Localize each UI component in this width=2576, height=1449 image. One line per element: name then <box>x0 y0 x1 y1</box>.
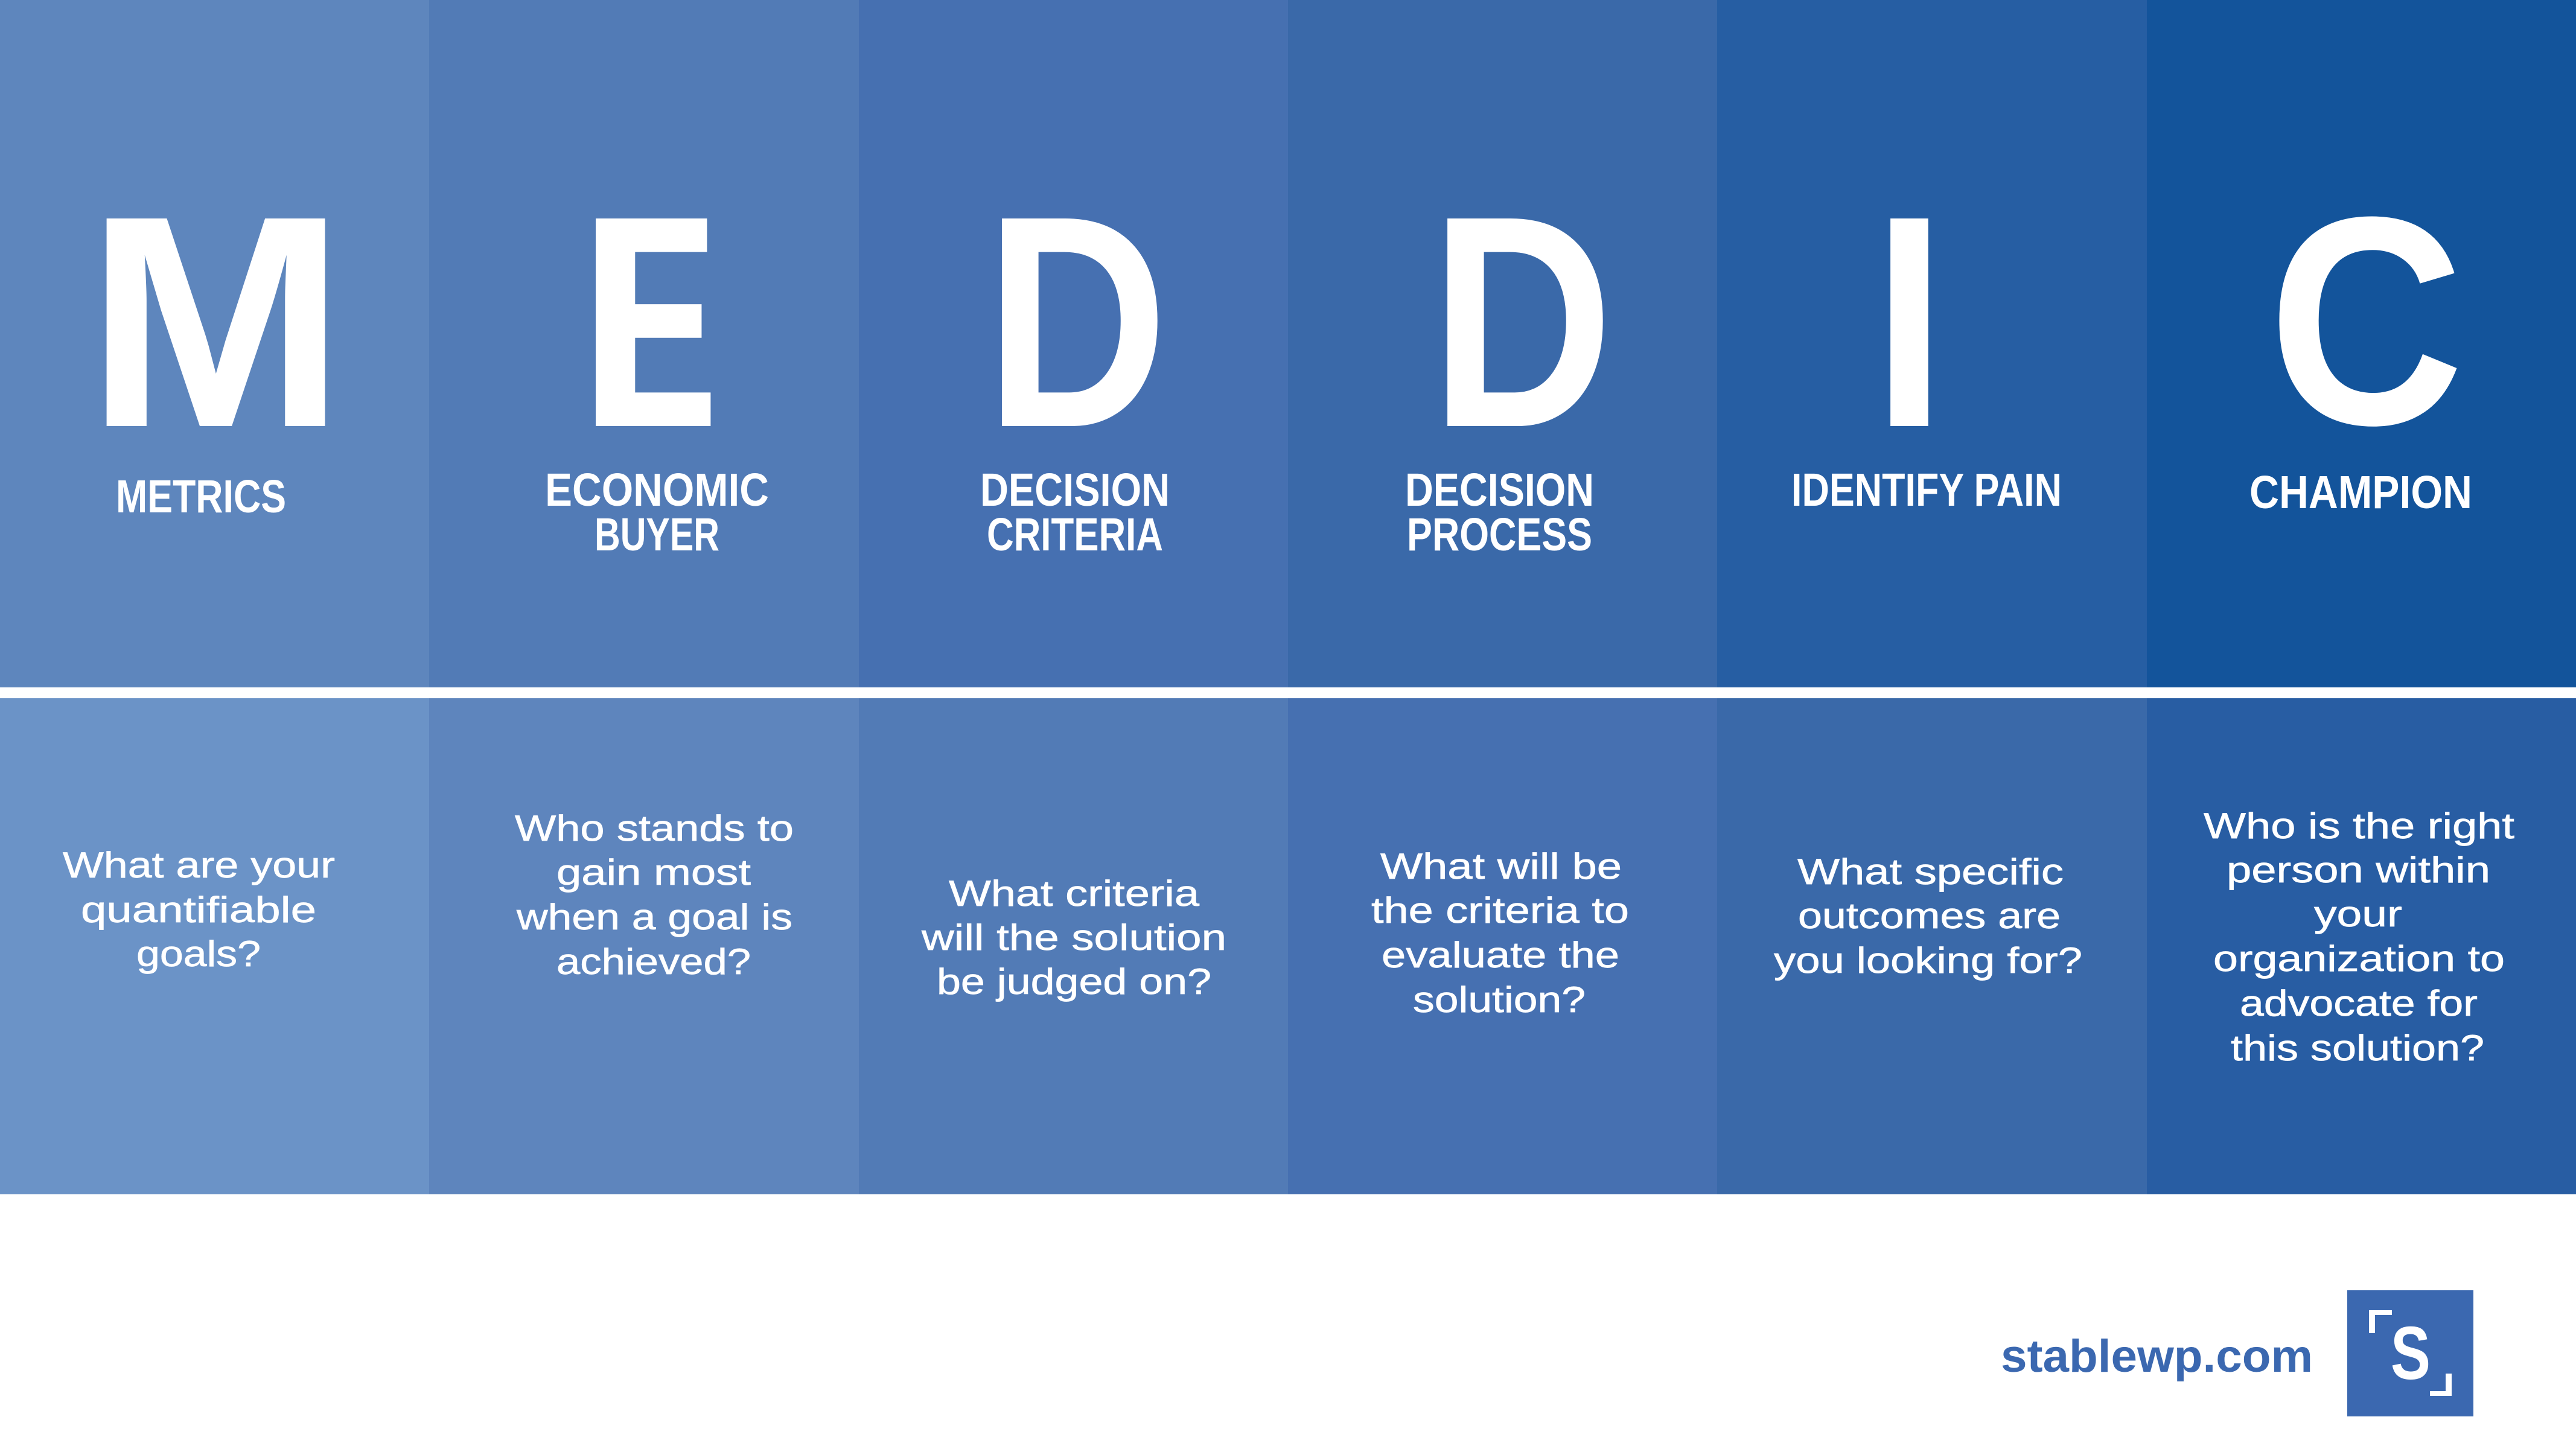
question: Identify Pain <box>1774 852 2082 981</box>
panel: Metrics <box>0 0 429 1194</box>
question: Decision Criteria <box>921 873 1226 1002</box>
label: Decision Criteria: CRITERIA <box>987 509 1163 561</box>
label: Identify Pain: IDENTIFY PAIN <box>1791 464 2062 516</box>
question: Champion: Who is the right <box>2204 806 2514 846</box>
label: Metrics: METRICS <box>116 471 286 523</box>
question: Champion: your <box>2314 894 2402 934</box>
question: Identify Pain: you looking for? <box>1774 940 2082 981</box>
big letter M: M <box>86 153 346 490</box>
big letter C: C <box>2268 154 2464 486</box>
panel: Champion <box>2147 0 2576 1194</box>
question: Champion: organization to <box>2213 938 2505 979</box>
question: Champion: this solution? <box>2231 1028 2484 1068</box>
big letter E: E <box>590 154 711 491</box>
label: Decision Process: PROCESS <box>1407 509 1592 561</box>
label: Economic Buyer: BUYER <box>595 509 719 561</box>
big letter D: D <box>1430 153 1613 490</box>
question: Decision Process <box>1371 846 1629 1020</box>
question: Champion: person within <box>2227 850 2490 890</box>
panel: Decision Process <box>1288 0 1717 1194</box>
label: Decision Criteria <box>980 464 1170 561</box>
label: Economic Buyer: ECONOMIC <box>545 464 769 516</box>
label: Economic Buyer <box>545 464 769 561</box>
big letter D: D <box>985 153 1168 490</box>
question: Decision Process: What will be <box>1380 846 1622 887</box>
question: Economic Buyer: when a goal is <box>516 897 792 937</box>
question: Decision Criteria: will the solution <box>921 917 1226 958</box>
panel: Identify Pain <box>1717 0 2147 1194</box>
question: Metrics: What are your <box>63 845 335 885</box>
icon: logo: S <box>2391 1311 2431 1395</box>
question: Economic Buyer: Who stands to <box>515 808 794 849</box>
question: Decision Criteria: be judged on? <box>937 961 1211 1002</box>
label: Decision Process: DECISION <box>1405 464 1594 516</box>
question: Decision Process: solution? <box>1413 979 1586 1020</box>
question: Champion <box>2204 806 2514 1068</box>
question: Decision Process: the criteria to <box>1371 890 1629 931</box>
question: Economic Buyer <box>515 808 794 982</box>
question: Metrics: quantifiable <box>81 890 316 930</box>
question: Economic Buyer: gain most <box>556 852 751 893</box>
icon: logo <box>2347 1290 2473 1416</box>
panel: Decision Criteria <box>859 0 1288 1194</box>
panel: Economic Buyer <box>429 0 859 1194</box>
question: Decision Criteria: What criteria <box>949 873 1200 914</box>
question: Economic Buyer: achieved? <box>556 941 751 982</box>
label: Decision Process <box>1405 464 1594 561</box>
brand name: stablewp.com <box>2001 1331 2313 1382</box>
question: Identify Pain: outcomes are <box>1798 896 2061 936</box>
question: Metrics: goals? <box>136 934 261 974</box>
question: Metrics <box>63 845 335 974</box>
label: Decision Criteria: DECISION <box>980 464 1170 516</box>
big letter I: I <box>1873 154 1946 491</box>
question: Champion: advocate for <box>2240 983 2478 1024</box>
label: Champion: CHAMPION <box>2249 467 2472 518</box>
question: Identify Pain: What specific <box>1797 852 2064 892</box>
question: Decision Process: evaluate the <box>1382 935 1619 975</box>
